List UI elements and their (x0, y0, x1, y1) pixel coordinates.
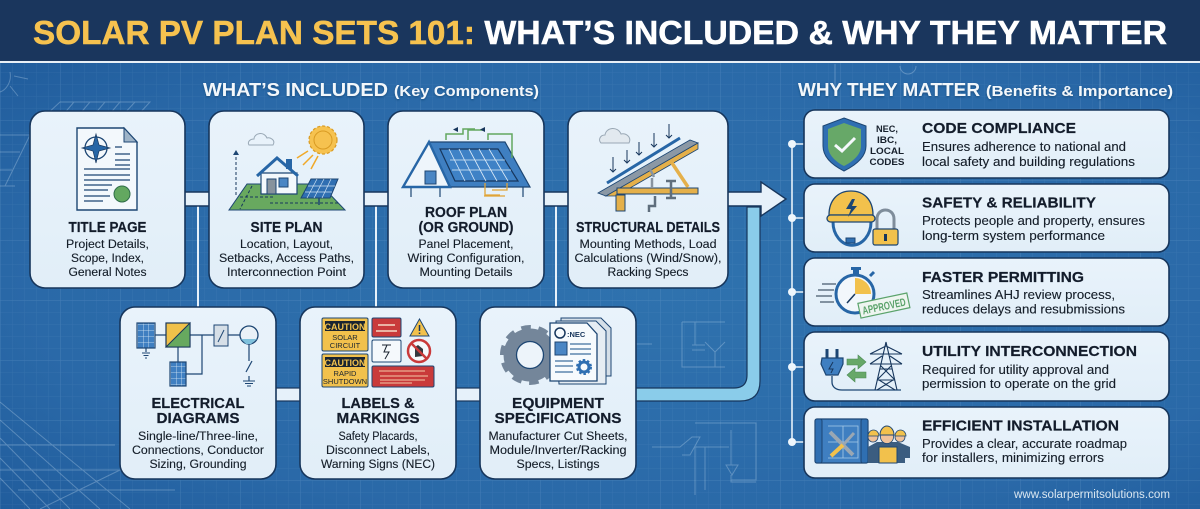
title: SOLAR PV PLAN SETS 101: (33, 14, 475, 51)
icon: document with compass and seal (77, 128, 137, 210)
heading: EFFICIENT INSTALLATION (922, 418, 1119, 434)
description (922, 140, 1135, 169)
icon: plug, arrows and transmission tower (821, 342, 902, 390)
description: Interconnection Point (227, 265, 347, 279)
heading: what's included: WHAT’S INCLUDED (203, 80, 388, 100)
heading (336, 396, 420, 427)
description (66, 237, 149, 279)
panel: utility interconnection (804, 332, 1169, 401)
description: long-term system performance (922, 229, 1105, 243)
description: Calculations (Wind/Snow), (574, 251, 722, 265)
heading: EQUIPMENT (512, 396, 604, 412)
panel: title page (30, 111, 185, 288)
description (922, 214, 1145, 243)
description: General Notes (68, 265, 146, 279)
icon: blueprint, tools and workers (815, 419, 910, 463)
codes label (870, 124, 904, 168)
heading: LABELS & (342, 396, 415, 412)
icon: gear and spec sheets: :NEC (567, 330, 586, 339)
icon: roof framing with load arrows (598, 124, 698, 212)
icon: caution and warning labels: SOLAR (332, 333, 358, 342)
description (219, 237, 354, 279)
description (922, 437, 1127, 465)
heading: STRUCTURAL DETAILS (576, 220, 720, 236)
description: Project Details, (66, 237, 149, 251)
panel: efficient installation (804, 407, 1169, 478)
panel: faster permitting (804, 258, 1169, 326)
icon: stopwatch with approved stamp (816, 267, 910, 318)
heading: why they matter: (Benefits & Importance) (986, 84, 1173, 100)
heading: UTILITY INTERCONNECTION (922, 343, 1137, 360)
codes label: CODES (870, 157, 904, 168)
description: Setbacks, Access Paths, (219, 251, 354, 265)
icon: roof with solar array (403, 127, 530, 197)
heading: FASTER PERMITTING (922, 269, 1084, 286)
description: Specs, Listings (516, 457, 600, 471)
arrow: curved return pipe from row 2 (630, 207, 760, 401)
benefits rail (788, 140, 804, 446)
description: Mounting Details (420, 265, 512, 279)
icon: caution and warning labels: CAUTION (324, 322, 366, 332)
icon: gear and spec sheets (504, 318, 611, 384)
panel: labels and markings (300, 307, 456, 479)
description: Wiring Configuration, (408, 251, 524, 265)
description: Connections, Conductor (132, 443, 264, 457)
icon: caution and warning labels: RAPID (334, 369, 357, 378)
description: for installers, minimizing errors (922, 451, 1104, 465)
panel: site plan (209, 111, 364, 288)
description (132, 429, 264, 471)
heading: DIAGRAMS (156, 411, 240, 427)
description: Required for utility approval and (922, 363, 1109, 377)
description (408, 237, 524, 279)
description: Single-line/Three-line, (138, 429, 258, 443)
website url: www.solarpermitsolutions.com (1013, 489, 1170, 501)
heading: TITLE PAGE (68, 220, 147, 236)
icon: hard hat and padlock (827, 191, 898, 245)
heading: what's included: (Key Components) (394, 84, 539, 100)
header bar (0, 0, 1200, 63)
icon: caution and warning labels: CAUTION (324, 358, 366, 368)
description (488, 429, 628, 471)
description: Ensures adherence to national and (922, 140, 1126, 154)
description: Manufacturer Cut Sheets, (488, 429, 628, 443)
description (321, 429, 435, 471)
description: reduces delays and resubmissions (922, 302, 1125, 316)
icon: shield with check (823, 118, 866, 171)
description: Panel Placement, (418, 237, 514, 251)
codes label: IBC, (877, 135, 897, 146)
panel: safety and reliability (804, 184, 1169, 252)
description: Provides a clear, accurate roadmap (922, 437, 1127, 451)
heading: (OR GROUND) (418, 220, 514, 236)
connector: bottom row (200, 388, 560, 401)
heading: ELECTRICAL (152, 396, 245, 412)
description: Streamlines AHJ review process, (922, 288, 1115, 302)
panel: structural details (568, 111, 728, 288)
description: Module/Inverter/Racking (490, 443, 626, 457)
panel: roof plan (388, 111, 544, 288)
description: Protects people and property, ensures (922, 214, 1145, 228)
codes label: NEC, (876, 124, 898, 135)
heading: CODE COMPLIANCE (922, 120, 1076, 137)
description: Racking Specs (608, 265, 688, 279)
heading: ROOF PLAN (425, 205, 507, 221)
description: Warning Signs (NEC) (321, 457, 435, 471)
title: WHAT’S INCLUDED & WHY THEY MATTER (475, 14, 1167, 51)
description: Disconnect Labels, (326, 443, 430, 457)
description (922, 363, 1116, 391)
heading (494, 396, 622, 427)
heading: MARKINGS (336, 411, 420, 427)
description: Scope, Index, (71, 251, 144, 265)
icon: caution and warning labels: SHUTDOWN (323, 377, 367, 386)
description: local safety and building regulations (922, 155, 1135, 169)
arrow: top row flow to benefits (100, 182, 786, 216)
icon: caution and warning labels (322, 318, 434, 387)
description (922, 288, 1125, 316)
heading (152, 396, 245, 427)
description: Safety Placards, (338, 429, 418, 443)
panel: equipment specifications (480, 307, 636, 479)
icon: stopwatch with approved stamp: APPROVED (861, 297, 907, 317)
heading (418, 205, 514, 236)
icon: house, sun and panels on a lot (229, 126, 345, 210)
heading: SITE PLAN (250, 220, 322, 236)
icon: caution and warning labels: CIRCUIT (330, 341, 361, 350)
heading: SAFETY & RELIABILITY (922, 194, 1096, 212)
description: Location, Layout, (240, 237, 333, 251)
heading: why they matter: WHY THEY MATTER (798, 80, 980, 100)
description: Mounting Methods, Load (580, 237, 716, 251)
panel: electrical diagrams (120, 307, 276, 479)
description: permission to operate on the grid (922, 377, 1116, 391)
heading: SPECIFICATIONS (494, 411, 622, 427)
panel: code compliance (804, 110, 1169, 178)
description (574, 237, 722, 279)
thin vertical connectors between rows (197, 206, 557, 307)
description: Sizing, Grounding (150, 457, 246, 471)
codes label: LOCAL (870, 146, 904, 157)
icon: single-line wiring diagram (137, 323, 258, 386)
